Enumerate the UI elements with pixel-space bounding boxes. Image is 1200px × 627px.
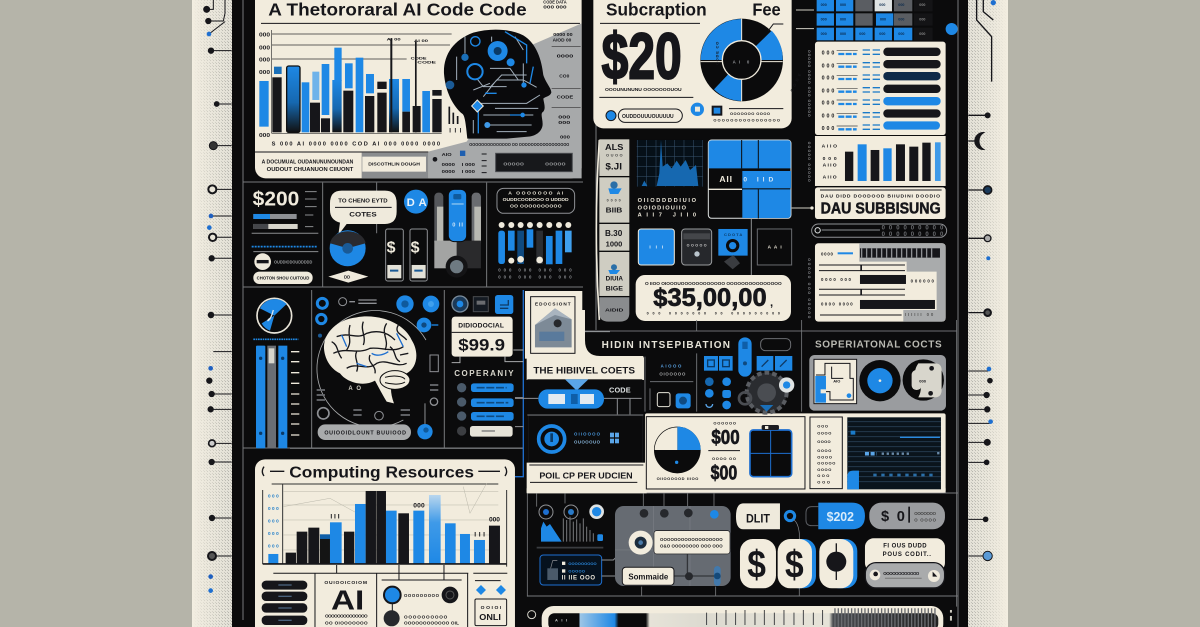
- hidden integration header: HIDIN INTSEPIBATION: [602, 340, 730, 351]
- brain surrounding icons: [317, 295, 439, 440]
- vertical cell list: 0000: [607, 198, 621, 202]
- heatmap grid: 000: [879, 3, 885, 7]
- panel: subscription fee: OOOUNUNUNU OOOOOOOUOU: [605, 87, 682, 93]
- hidden cost heading: THE HIBIIVEL COETS: [533, 365, 635, 375]
- device: sliders pill: [434, 189, 481, 278]
- left side connectors: [204, 0, 232, 318]
- status pill and icons: [606, 103, 783, 123]
- note box: dark outline: OO OOOOOOOOOO: [510, 204, 562, 210]
- heatmap grid: 000: [840, 18, 846, 22]
- bar chart: AI costs: [259, 30, 452, 148]
- $202 tag: [806, 503, 865, 529]
- pie with $00 prices: OOOO OO: [712, 456, 736, 461]
- bar chart: AI costs: AI 00: [414, 39, 428, 43]
- chart footer strip: 0000: [442, 162, 456, 167]
- stat panel: $35,00,00: O IIOO OIOOOUOOOOOOOOOOOO OOOOOOOOOOOOOOO: [645, 281, 782, 287]
- node legend: OOOOOOOOOOOO OIL: [404, 620, 459, 625]
- $200 stat: [252, 188, 368, 284]
- chip card: II IIE OOO: [562, 575, 595, 581]
- chip card: OOOOO: [568, 568, 585, 573]
- circuit board panel: Sommaide: [628, 572, 668, 582]
- side tick texts: OOOOO OOO OOOOO: [808, 258, 812, 318]
- bar chart: computing usage: III: [474, 532, 485, 539]
- power ring card: OIIOOOO: [574, 431, 601, 436]
- heatmap grid: 000: [898, 18, 904, 22]
- side data table: [469, 32, 581, 147]
- note box: dark outline: [497, 188, 575, 213]
- stat panel: $35,00,00: 000 0000000 00 000000000: [647, 311, 780, 315]
- bar chart: computing usage: 000: [268, 531, 279, 536]
- panel: operational costs tiles: 000: [919, 379, 927, 384]
- icon: AI brain: A O: [348, 386, 361, 392]
- vertical cell list: DIUIA: [606, 276, 623, 283]
- black infographic board: [232, 0, 968, 627]
- pie chart: subscription split: [700, 19, 802, 101]
- icon: pricing house card: [525, 291, 582, 359]
- price cards: $: [411, 240, 420, 257]
- line chart: AII7 JII0: [638, 213, 696, 219]
- vertical cell list: ALS: [605, 142, 624, 152]
- side data table: CO0: [559, 73, 570, 78]
- heatmap grid: 000: [840, 32, 846, 36]
- panel: operational costs tiles: [809, 355, 946, 411]
- right side connectors lower: [968, 367, 993, 561]
- bar chart: computing usage: 000: [268, 506, 279, 511]
- pie with $00 prices: OIIOOOOOD IIIOO: [657, 476, 698, 481]
- operational rows panel: 0000 0000: [821, 302, 853, 307]
- panel: hidden cost middle band: [515, 310, 957, 493]
- circuit board panel: O&O OOOOOOOO OOO OOO: [660, 544, 723, 549]
- chart footer strip: 00000: [545, 161, 566, 166]
- mini bars beside head: [449, 107, 458, 124]
- $200 stat: CHOTON SHOU CUITOUD: [257, 275, 310, 280]
- icon: gauge dial: [257, 298, 292, 333]
- integration icons: [645, 337, 794, 413]
- $0 gray pill: OOOOOOO: [914, 511, 937, 516]
- line chart: OOIODIOUIIO: [638, 205, 687, 211]
- vertical cell list: BIIB: [606, 206, 622, 215]
- $0 gray pill: [869, 503, 945, 529]
- table panel: [815, 42, 946, 135]
- data stream panel: OOOO: [817, 455, 832, 460]
- heatmap grid: 000: [859, 32, 865, 36]
- bar chart: AI costs: CODE: [411, 56, 427, 60]
- speech bubble: cost codes: [330, 191, 397, 235]
- panel: operational costs tiles: AIO: [833, 379, 840, 384]
- price cards: $: [387, 240, 396, 257]
- bar chart: computing usage: 000: [268, 543, 279, 548]
- panel: computing resources: [255, 459, 515, 627]
- DAU subscription label: [792, 187, 946, 219]
- icon: blue circle DA: DA: [407, 197, 427, 209]
- side data table: 0000 00: [553, 32, 573, 37]
- note with pill: POUS CODIT..: [883, 552, 931, 558]
- $0 gray pill: O OOOO: [914, 518, 937, 523]
- data stream panel: OOO: [817, 424, 828, 429]
- chart footer strip: AIO: [442, 152, 452, 157]
- code pill diagram: CODE: [609, 385, 631, 394]
- AI label: [324, 580, 368, 625]
- dollar buttons: $: [785, 542, 804, 586]
- operational rows panel: 0000 000: [821, 277, 852, 282]
- pie chart: subscription split: CODE: [789, 72, 802, 93]
- cream backing frames: [527, 310, 946, 493]
- bottom progress bar: AII: [555, 618, 567, 623]
- left side connectors lower: [207, 312, 232, 593]
- table panel: 000: [822, 51, 834, 57]
- stat panel: $35,00,00: ,: [770, 297, 773, 309]
- bar chart: DAU: 000: [823, 156, 837, 162]
- note with pill: [865, 538, 945, 588]
- $0 gray pill: $ 0: [881, 509, 905, 525]
- right side connectors: [968, 0, 996, 316]
- node legend: OOOOOOOOOO: [404, 614, 448, 619]
- slider bars: 000 000 000 000: [498, 268, 572, 273]
- slider outline pill: [812, 224, 947, 238]
- data stream panel: OOOO: [817, 439, 831, 444]
- vertical cell list: AIDID: [605, 308, 624, 314]
- panel: subscription fee: Fee: [752, 0, 781, 20]
- panel: central stats column: [596, 139, 792, 322]
- data stream panel: OOO: [817, 479, 830, 484]
- bar chart: computing usage: 000: [268, 494, 279, 499]
- cost per user label: POIL CP PER UDCIEN: [539, 470, 633, 480]
- power ring card: [528, 416, 642, 462]
- bar chart: DAU: AIIO: [823, 174, 837, 180]
- $202 tag: $202: [827, 510, 854, 524]
- dollar buttons: [740, 539, 857, 588]
- table panel: 000: [822, 126, 834, 132]
- data stream panel: OOOO: [817, 430, 831, 435]
- bar chart: computing usage: [263, 483, 507, 567]
- side data table: OOOOOOOOOOOOOO OO OOOOOOOOOOOOOOOOO: [469, 142, 570, 147]
- vertical cell list: 1000: [606, 240, 622, 249]
- small icon tiles: CDOTA: [724, 232, 742, 237]
- heatmap grid: 000: [919, 3, 925, 7]
- heatmap grid: 000: [898, 32, 904, 36]
- pie with $00 prices: [646, 417, 805, 489]
- bar chart: computing usage: 000: [413, 502, 425, 509]
- AI label: OOOOOOOOOOOOOO: [325, 613, 368, 618]
- pie with $00 prices: $00: [711, 461, 737, 484]
- heading: A Thetororaral AI Code Code: [268, 0, 527, 20]
- stat panel: $35,00,00: [636, 218, 791, 321]
- panel: individual $99.9: $99.9: [458, 336, 505, 355]
- tall gauge bars: [253, 339, 299, 448]
- bar chart: computing usage: 000: [268, 519, 279, 524]
- $20 price: $20: [602, 19, 682, 92]
- $200 stat: $200: [253, 188, 299, 211]
- chart footer strip: I 000: [462, 162, 476, 167]
- pie chart: subscription split: AI 0: [733, 59, 750, 64]
- table panel: 000: [822, 63, 834, 69]
- side tick texts: OOOOO OOO OOOO OOOOO: [808, 50, 812, 117]
- status pill and icons: OOOOOOOOOOOOOOOO: [713, 118, 780, 123]
- panel: individual $99.9: COPERANIY: [454, 369, 514, 378]
- node legend: [382, 580, 462, 626]
- DLIT label: DLIT: [746, 512, 771, 526]
- heatmap grid: [796, 0, 958, 40]
- operational rows panel: [815, 243, 946, 322]
- chart footer strip: A DOCUMUAL OUDANUNUNOUNDAN: [262, 160, 353, 166]
- right paper margin: [966, 0, 1008, 627]
- DLIT label: [736, 503, 799, 587]
- table panel: 000: [822, 76, 834, 82]
- hidden integration header: [585, 320, 957, 412]
- data stream panel: OOOOO: [817, 461, 835, 466]
- data stream panel: OOO: [817, 473, 829, 478]
- circuit board panel: OOOOOOOOOOOOOOOOOO: [660, 537, 723, 542]
- icon: blue circle DA: [404, 190, 428, 214]
- pie with $00 prices: OOOOOO: [713, 420, 736, 425]
- note with pill: OOOOOOOOOOOO: [883, 571, 920, 576]
- integration icons: OIOOOOO: [659, 372, 686, 377]
- heatmap grid: 000: [898, 3, 904, 7]
- $200 stat: OUDDIODOUDDDDD: [274, 259, 313, 265]
- right connector: [583, 330, 610, 333]
- slider outline pill: 000000000: [882, 232, 944, 238]
- icon: AI brain: [317, 311, 426, 427]
- vertical cell list: $.JI: [605, 161, 622, 171]
- chart footer strip: OUDOUT CHUANUON CIIUONT: [267, 167, 354, 173]
- small icon tiles: A A I: [768, 245, 782, 250]
- icon: pricing house card: EDOCSIONT: [535, 301, 571, 306]
- DAU subscription label: DAU SUBBISUNG: [821, 200, 941, 217]
- heatmap grid: 000: [919, 32, 925, 36]
- left paper margin: [192, 0, 234, 627]
- chart footer strip: 0000: [442, 169, 456, 174]
- slider bars: [498, 222, 572, 279]
- speech bubble: cost codes: TO CHENO EYTD: [338, 199, 388, 205]
- $200 stat: DD: [344, 274, 350, 279]
- chart footer strip: 00000: [503, 161, 525, 166]
- data stream panel: OOOO: [817, 467, 831, 472]
- AI label: OUIOOICOIOM: [324, 580, 367, 586]
- board frame lines: [243, 0, 958, 627]
- panel: pricing controls bottom band: [527, 320, 957, 627]
- heatmap grid: 000: [821, 32, 827, 36]
- note with pill: FI OUS DUDD: [883, 544, 927, 550]
- bar chart: DAU: [815, 136, 946, 186]
- table panel: 000: [822, 113, 834, 119]
- donut chart: [330, 230, 366, 266]
- small icon tiles: [638, 229, 792, 269]
- side data table: 000: [558, 114, 571, 119]
- side data table: 0000: [557, 53, 574, 58]
- chart footer strip: [255, 151, 572, 178]
- vertical cell list: [596, 139, 629, 322]
- legend pills: [262, 581, 307, 625]
- node legend: OOOOOOOOO: [404, 593, 440, 598]
- slider bars: 000 000 000 000: [498, 274, 572, 279]
- blue grid panel: 0 IID: [743, 176, 774, 183]
- line chart: OIIODDDDIUIO: [638, 198, 697, 204]
- side data table: 000: [560, 134, 571, 139]
- data stream panel: OOOO: [817, 448, 831, 453]
- heatmap grid: 000: [840, 3, 846, 7]
- only box: ONLI: [479, 612, 501, 622]
- heading: Subcraption: [606, 0, 707, 20]
- note box: dark outline: A OOOOOOO AI: [508, 190, 564, 196]
- panel: individual $99.9: [452, 295, 523, 437]
- side data table: AIOD 00: [553, 37, 572, 42]
- panel: theoretical AI code cost: 000 000: [543, 5, 567, 10]
- only box: OOIOI: [481, 605, 502, 611]
- note box: dark outline: OUDDCOODOOO O UDDDD: [503, 197, 569, 203]
- blue grid panel: [708, 140, 791, 218]
- bar chart: AI costs: AI 00: [387, 37, 401, 41]
- hidden integration header: SOPERIATONAL COCTS: [815, 340, 942, 351]
- bar chart: AI costs: 000: [259, 133, 270, 139]
- cost per user label: [529, 465, 643, 482]
- brain surrounding icons: OUIOOIDLOUNT BUUIOOD: [324, 430, 406, 436]
- heatmap grid: 000: [879, 32, 885, 36]
- table panel: 000: [822, 101, 834, 107]
- speech bubble: cost codes: COTES: [349, 212, 377, 219]
- only box: [475, 585, 507, 626]
- bar chart: computing usage: III: [330, 513, 340, 520]
- line chart: [637, 140, 703, 219]
- bar chart: AI costs: 000: [259, 45, 270, 51]
- vertical cell list: BIGE: [606, 286, 624, 293]
- code pill diagram: [515, 379, 643, 415]
- slider outline pill: 000000000: [882, 225, 944, 231]
- bar chart: AI costs: 000: [259, 33, 270, 39]
- heatmap grid: 000: [919, 18, 925, 22]
- mini histogram: [537, 504, 604, 548]
- small icon tiles: OOOOO: [687, 244, 707, 248]
- heatmap grid: 000: [880, 18, 886, 22]
- AI label: AI: [331, 584, 364, 615]
- operational rows panel: 000000: [911, 278, 935, 283]
- panel: right column: [792, 0, 958, 322]
- dollar buttons: $: [747, 542, 766, 586]
- side tick texts: [808, 50, 812, 318]
- pie chart: subscription split: CODE CO: [714, 42, 719, 65]
- price cards: [386, 229, 427, 281]
- chart footer strip: I 000: [462, 169, 476, 174]
- panel: subscription fee: [593, 0, 802, 128]
- bar chart: AI costs: 000: [259, 70, 270, 76]
- heatmap grid: 000: [821, 3, 827, 7]
- small icon tiles: I I I: [649, 245, 663, 250]
- heading: Computing Resources: [289, 464, 474, 481]
- bar chart: AI costs: 000: [259, 57, 270, 63]
- chip card: [540, 550, 623, 585]
- vertical cell list: B.30: [605, 228, 622, 238]
- panel: theoretical AI code cost: III: [449, 129, 462, 135]
- side data table: 000: [558, 120, 571, 125]
- panel: brain and row three: [253, 290, 610, 477]
- pie with $00 prices: $00: [711, 426, 740, 449]
- DAU subscription label: DAU DIDD DOODOOD BIIUDINI DOODIO: [821, 193, 940, 199]
- power ring card: OUOOOUO: [574, 439, 601, 444]
- vertical cell list: OUOO: [606, 153, 623, 158]
- chip card: OOOOOOOOO: [568, 561, 597, 566]
- device: sliders pill: 0 II: [452, 223, 463, 229]
- bottom progress bar: [528, 606, 952, 627]
- operational rows panel: IIIIII 00: [905, 312, 934, 317]
- panel: theoretical AI code cost: [255, 0, 582, 178]
- bar chart: DAU: AIIO: [822, 144, 837, 150]
- operational rows panel: 0000: [821, 252, 834, 257]
- bar chart: AI costs: S 000 AI 0000 0000 COD AI 000 0000 0000: [272, 142, 440, 148]
- status pill and icons: OUDDOUUUOUUUUU: [622, 114, 674, 120]
- bar chart: DAU: AIIO: [823, 163, 837, 169]
- chart footer strip: DISCOTHLIN DOUGH: [368, 162, 420, 168]
- panel: individual $99.9: DIDIODOCIAL: [458, 323, 504, 330]
- bar chart: AI costs: CODE: [417, 60, 437, 64]
- data stream panel: [810, 417, 941, 489]
- blue grid panel: AII: [719, 174, 732, 184]
- AI label: OO OIOOOOOOO: [325, 620, 368, 625]
- icon: AI head with circuits: [444, 30, 551, 139]
- status pill and icons: OOOOOOO OOOO: [730, 111, 770, 116]
- bar chart: computing usage: 000: [489, 517, 500, 524]
- side tick texts: OOOOO OOOOO: [808, 141, 812, 182]
- circuit board panel: [615, 506, 731, 586]
- heatmap grid: 000: [821, 18, 827, 22]
- integration icons: AIOOO: [661, 363, 682, 368]
- side data table: CODE: [557, 94, 573, 99]
- stat panel: $35,00,00: $35,00,00: [653, 285, 767, 312]
- table panel: 000: [822, 88, 834, 94]
- panel: row two dark dashboards: [252, 183, 575, 287]
